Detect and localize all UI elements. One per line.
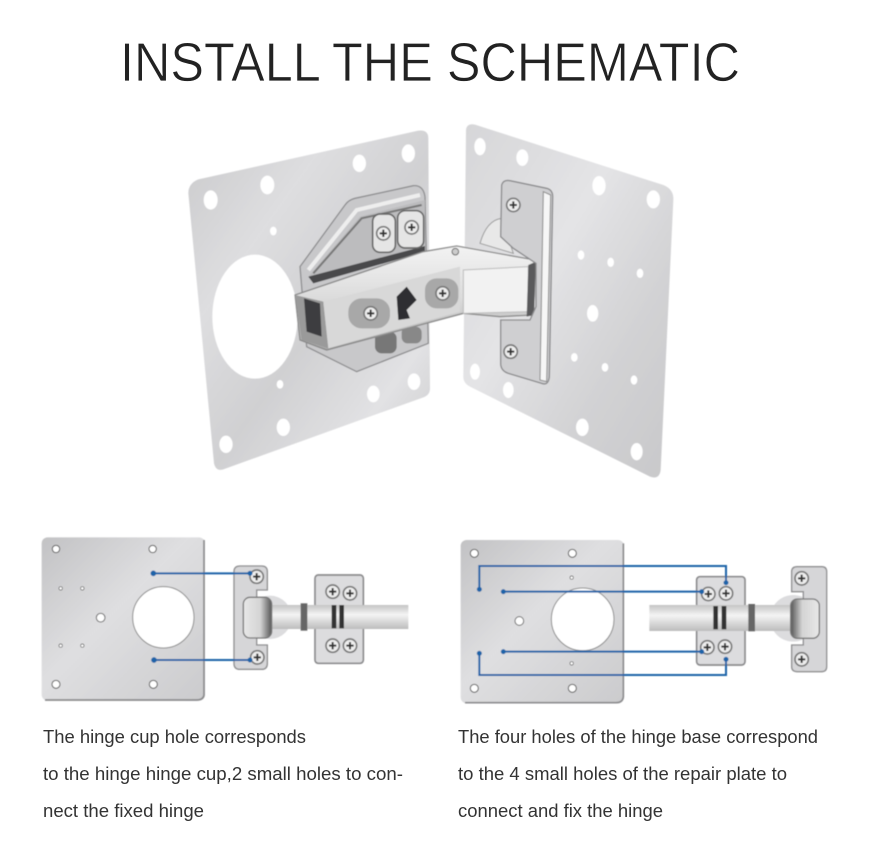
- main photo: hinge mounted on two repair plates: [188, 124, 673, 477]
- connector lines: [477, 566, 728, 675]
- cabinet hinge: [649, 567, 827, 672]
- left caption: [43, 727, 403, 821]
- left caption: nect the fixed hinge: [43, 801, 204, 821]
- left diagram: plate and hinge: [42, 537, 408, 701]
- title: INSTALL THE SCHEMATIC: [120, 31, 740, 93]
- small repair plate: [42, 537, 205, 701]
- right caption: The four holes of the hinge base correspond: [458, 727, 818, 747]
- small repair plate: [461, 540, 624, 703]
- right repair plate: [463, 124, 673, 477]
- left caption: The hinge cup hole corresponds: [43, 727, 306, 747]
- right caption: connect and fix the hinge: [458, 801, 663, 821]
- right caption: [458, 727, 818, 821]
- left caption: to the hinge hinge cup,2 small holes to con-: [43, 764, 403, 784]
- connector lines: [151, 571, 252, 663]
- right caption: to the 4 small holes of the repair plate to: [458, 764, 787, 784]
- hinge base plate with screws: [300, 186, 428, 372]
- left repair plate: [188, 130, 430, 470]
- right diagram: plate and hinge: [461, 540, 827, 703]
- hinge arm with screws: [295, 218, 536, 350]
- cabinet hinge: [234, 566, 408, 669]
- right mounting plate with screws: [501, 180, 553, 384]
